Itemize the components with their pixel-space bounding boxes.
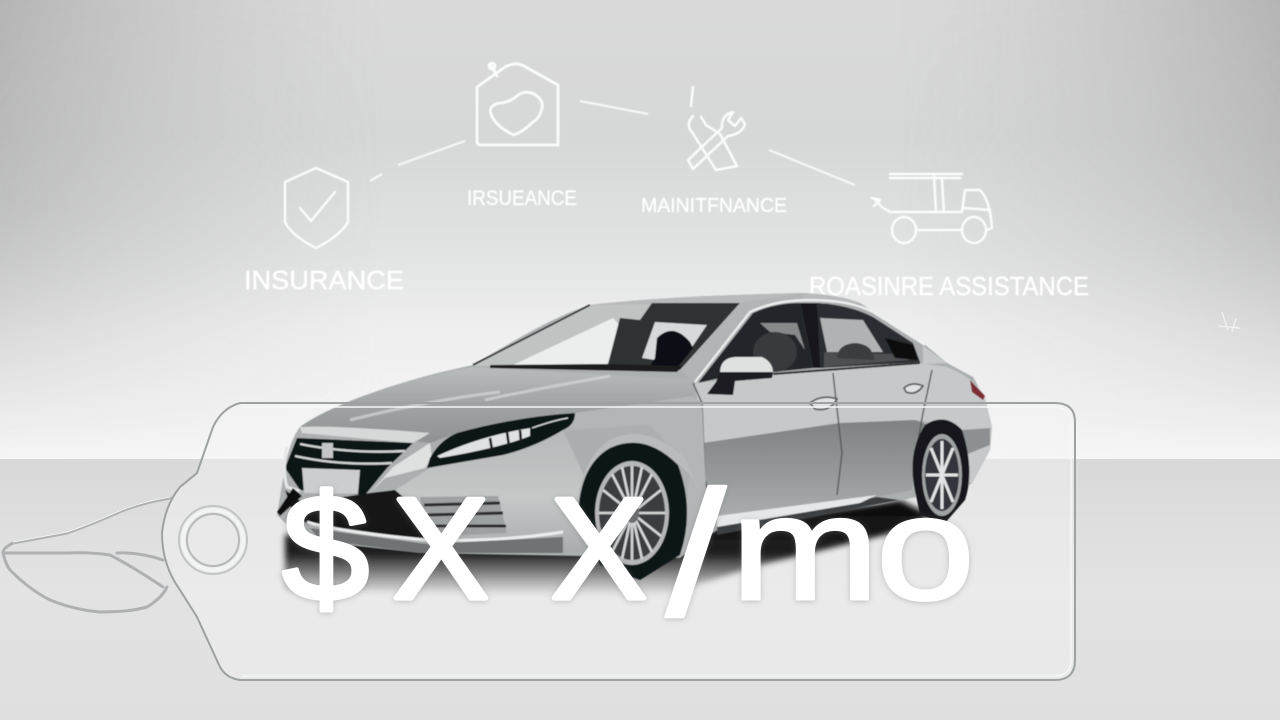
headlight xyxy=(427,413,575,468)
label: maintenance: MAINITFNANCE xyxy=(641,195,787,217)
car ground shadow xyxy=(285,500,930,596)
label: irsueance: IRSUEANCE xyxy=(467,187,577,210)
rear side window xyxy=(817,303,920,368)
price text: m xyxy=(731,465,879,631)
price text: / xyxy=(666,455,726,653)
tag string xyxy=(3,498,170,612)
beltline xyxy=(773,363,920,374)
front bumper xyxy=(330,430,585,553)
B-pillar xyxy=(800,303,823,368)
connector lines between icons xyxy=(370,101,855,185)
hood reflection lines xyxy=(350,376,610,420)
lower intake xyxy=(285,490,430,540)
price text: X xyxy=(393,469,489,629)
icon: shield with checkmark xyxy=(285,168,348,248)
front wheel xyxy=(577,434,700,580)
A-pillar xyxy=(680,293,803,382)
icon: tow truck xyxy=(872,174,992,243)
price text: X xyxy=(551,469,647,629)
quarter glass xyxy=(923,346,947,364)
price text: $ xyxy=(282,464,369,632)
front side window xyxy=(698,303,813,383)
faint glyph at right xyxy=(1218,312,1240,332)
front grille xyxy=(277,427,430,516)
door handles and seams xyxy=(686,370,990,520)
roof highlight xyxy=(590,293,860,305)
rear wheel xyxy=(912,420,969,523)
icon: crossed wrench and screwdriver xyxy=(688,87,745,170)
car body base xyxy=(277,293,992,558)
price text: o xyxy=(876,465,975,631)
price text xyxy=(282,455,975,653)
label: insurance: INSURANCE xyxy=(244,265,404,295)
window frame chrome xyxy=(695,300,925,382)
tag fill xyxy=(162,403,1075,680)
chrome wedge beside grille xyxy=(370,443,432,493)
door shadow band xyxy=(703,420,928,517)
background floor xyxy=(0,459,1280,720)
label: roadside assistance: ROASINRE ASSISTANCE xyxy=(809,271,1089,301)
icon: house with heart xyxy=(477,63,558,145)
side mirror xyxy=(707,357,773,395)
windshield xyxy=(473,303,740,371)
price tag outline xyxy=(3,403,1075,680)
tag eyelet rings xyxy=(179,506,247,574)
upper door panels xyxy=(695,363,992,483)
background wall xyxy=(0,0,1280,459)
front fender xyxy=(563,396,716,555)
wall side vignette xyxy=(0,0,1280,459)
side sill xyxy=(717,497,900,535)
car xyxy=(277,293,992,580)
hood xyxy=(300,367,697,443)
